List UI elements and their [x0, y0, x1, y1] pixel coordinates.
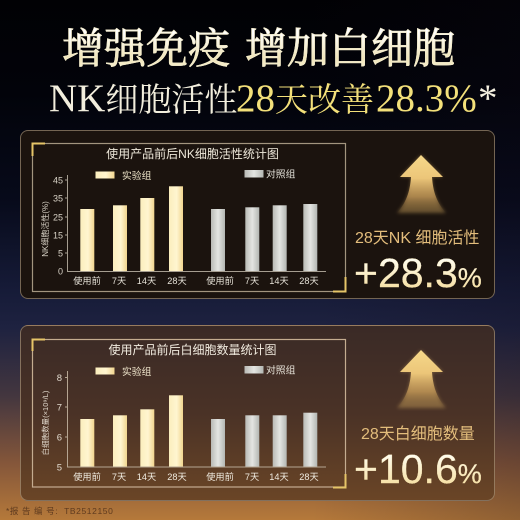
y axis: 5	[58, 248, 63, 258]
x labels: 7天	[112, 276, 126, 286]
x labels: 14天	[137, 472, 156, 482]
chart title: 使用产品前后白细胞数量统计图	[108, 342, 277, 357]
x labels: 28天	[167, 276, 187, 286]
y axis: 0	[58, 266, 63, 276]
legend: control group	[244, 168, 296, 180]
x labels: 使用前	[206, 275, 234, 286]
legend: experimental group	[96, 365, 152, 378]
x labels: 14天	[269, 472, 289, 482]
subtitle: NK cell activity improvement: NK细胞活性	[49, 77, 237, 120]
x labels: 14天	[269, 276, 289, 286]
y axis: 15	[53, 230, 63, 240]
title: main heading: 增加白细胞	[245, 27, 455, 73]
subtitle: NK cell activity improvement	[49, 77, 498, 120]
bars: experimental	[80, 395, 183, 466]
y axis: 25	[53, 212, 63, 222]
bars: experimental	[80, 186, 183, 271]
subtitle: NK cell activity improvement: 28.3%	[376, 77, 477, 120]
y axis: NK细胞活性(%)	[40, 201, 50, 257]
panel: NK cell activity	[20, 130, 495, 299]
x labels: 使用前	[206, 471, 234, 482]
title: main heading	[62, 26, 455, 73]
x labels: 7天	[245, 472, 259, 482]
x labels: 7天	[245, 276, 259, 286]
subtitle: NK cell activity improvement: *	[478, 77, 498, 120]
stat label: NK activity: 28天NK 细胞活性	[355, 230, 479, 247]
x labels: 14天	[137, 276, 156, 286]
x labels	[73, 275, 319, 286]
stat value: +10.6%: +10.6%	[354, 446, 482, 492]
panel: white blood cell count	[20, 325, 495, 501]
chart: white blood cell bar chart	[32, 340, 346, 488]
stat value: +28.3%: +28.3%	[354, 250, 482, 296]
legend: experimental group	[96, 169, 152, 182]
x labels: 使用前	[73, 471, 101, 482]
legend: control group: 对照组	[266, 168, 296, 180]
y axis: 7	[57, 402, 62, 414]
x labels: 使用前	[73, 275, 101, 286]
legend: control group: 对照组	[266, 364, 296, 376]
x labels: 7天	[112, 472, 126, 482]
icon: up arrow top	[397, 155, 446, 213]
y axis	[40, 175, 326, 276]
stat label: white blood cells: 28天白细胞数量	[361, 426, 475, 443]
bars: control	[211, 413, 317, 466]
y axis	[40, 371, 326, 474]
y axis: 6	[57, 432, 62, 444]
chart title: 使用产品前后NK细胞活性统计图	[106, 146, 279, 161]
x labels	[73, 471, 319, 482]
y axis: 45	[53, 176, 63, 186]
legend: control group	[244, 364, 296, 376]
legend: experimental group: 实验组	[122, 169, 152, 182]
y axis: 5	[57, 462, 62, 474]
x labels: 28天	[167, 472, 187, 482]
subtitle: NK cell activity improvement: 28天改善	[236, 77, 374, 120]
y axis: 35	[53, 194, 63, 204]
footnote: report number: *报 告 编 号: TB2512150	[6, 506, 113, 516]
y axis: 白细胞数量(×10⁹/L)	[40, 390, 50, 455]
x labels: 28天	[299, 472, 319, 482]
y axis: 8	[57, 373, 62, 384]
bars: control	[211, 204, 317, 271]
icon: up arrow bottom	[397, 350, 446, 408]
title: main heading: 增强免疫	[62, 27, 230, 73]
legend: experimental group: 实验组	[122, 365, 152, 378]
x labels: 28天	[299, 276, 319, 286]
